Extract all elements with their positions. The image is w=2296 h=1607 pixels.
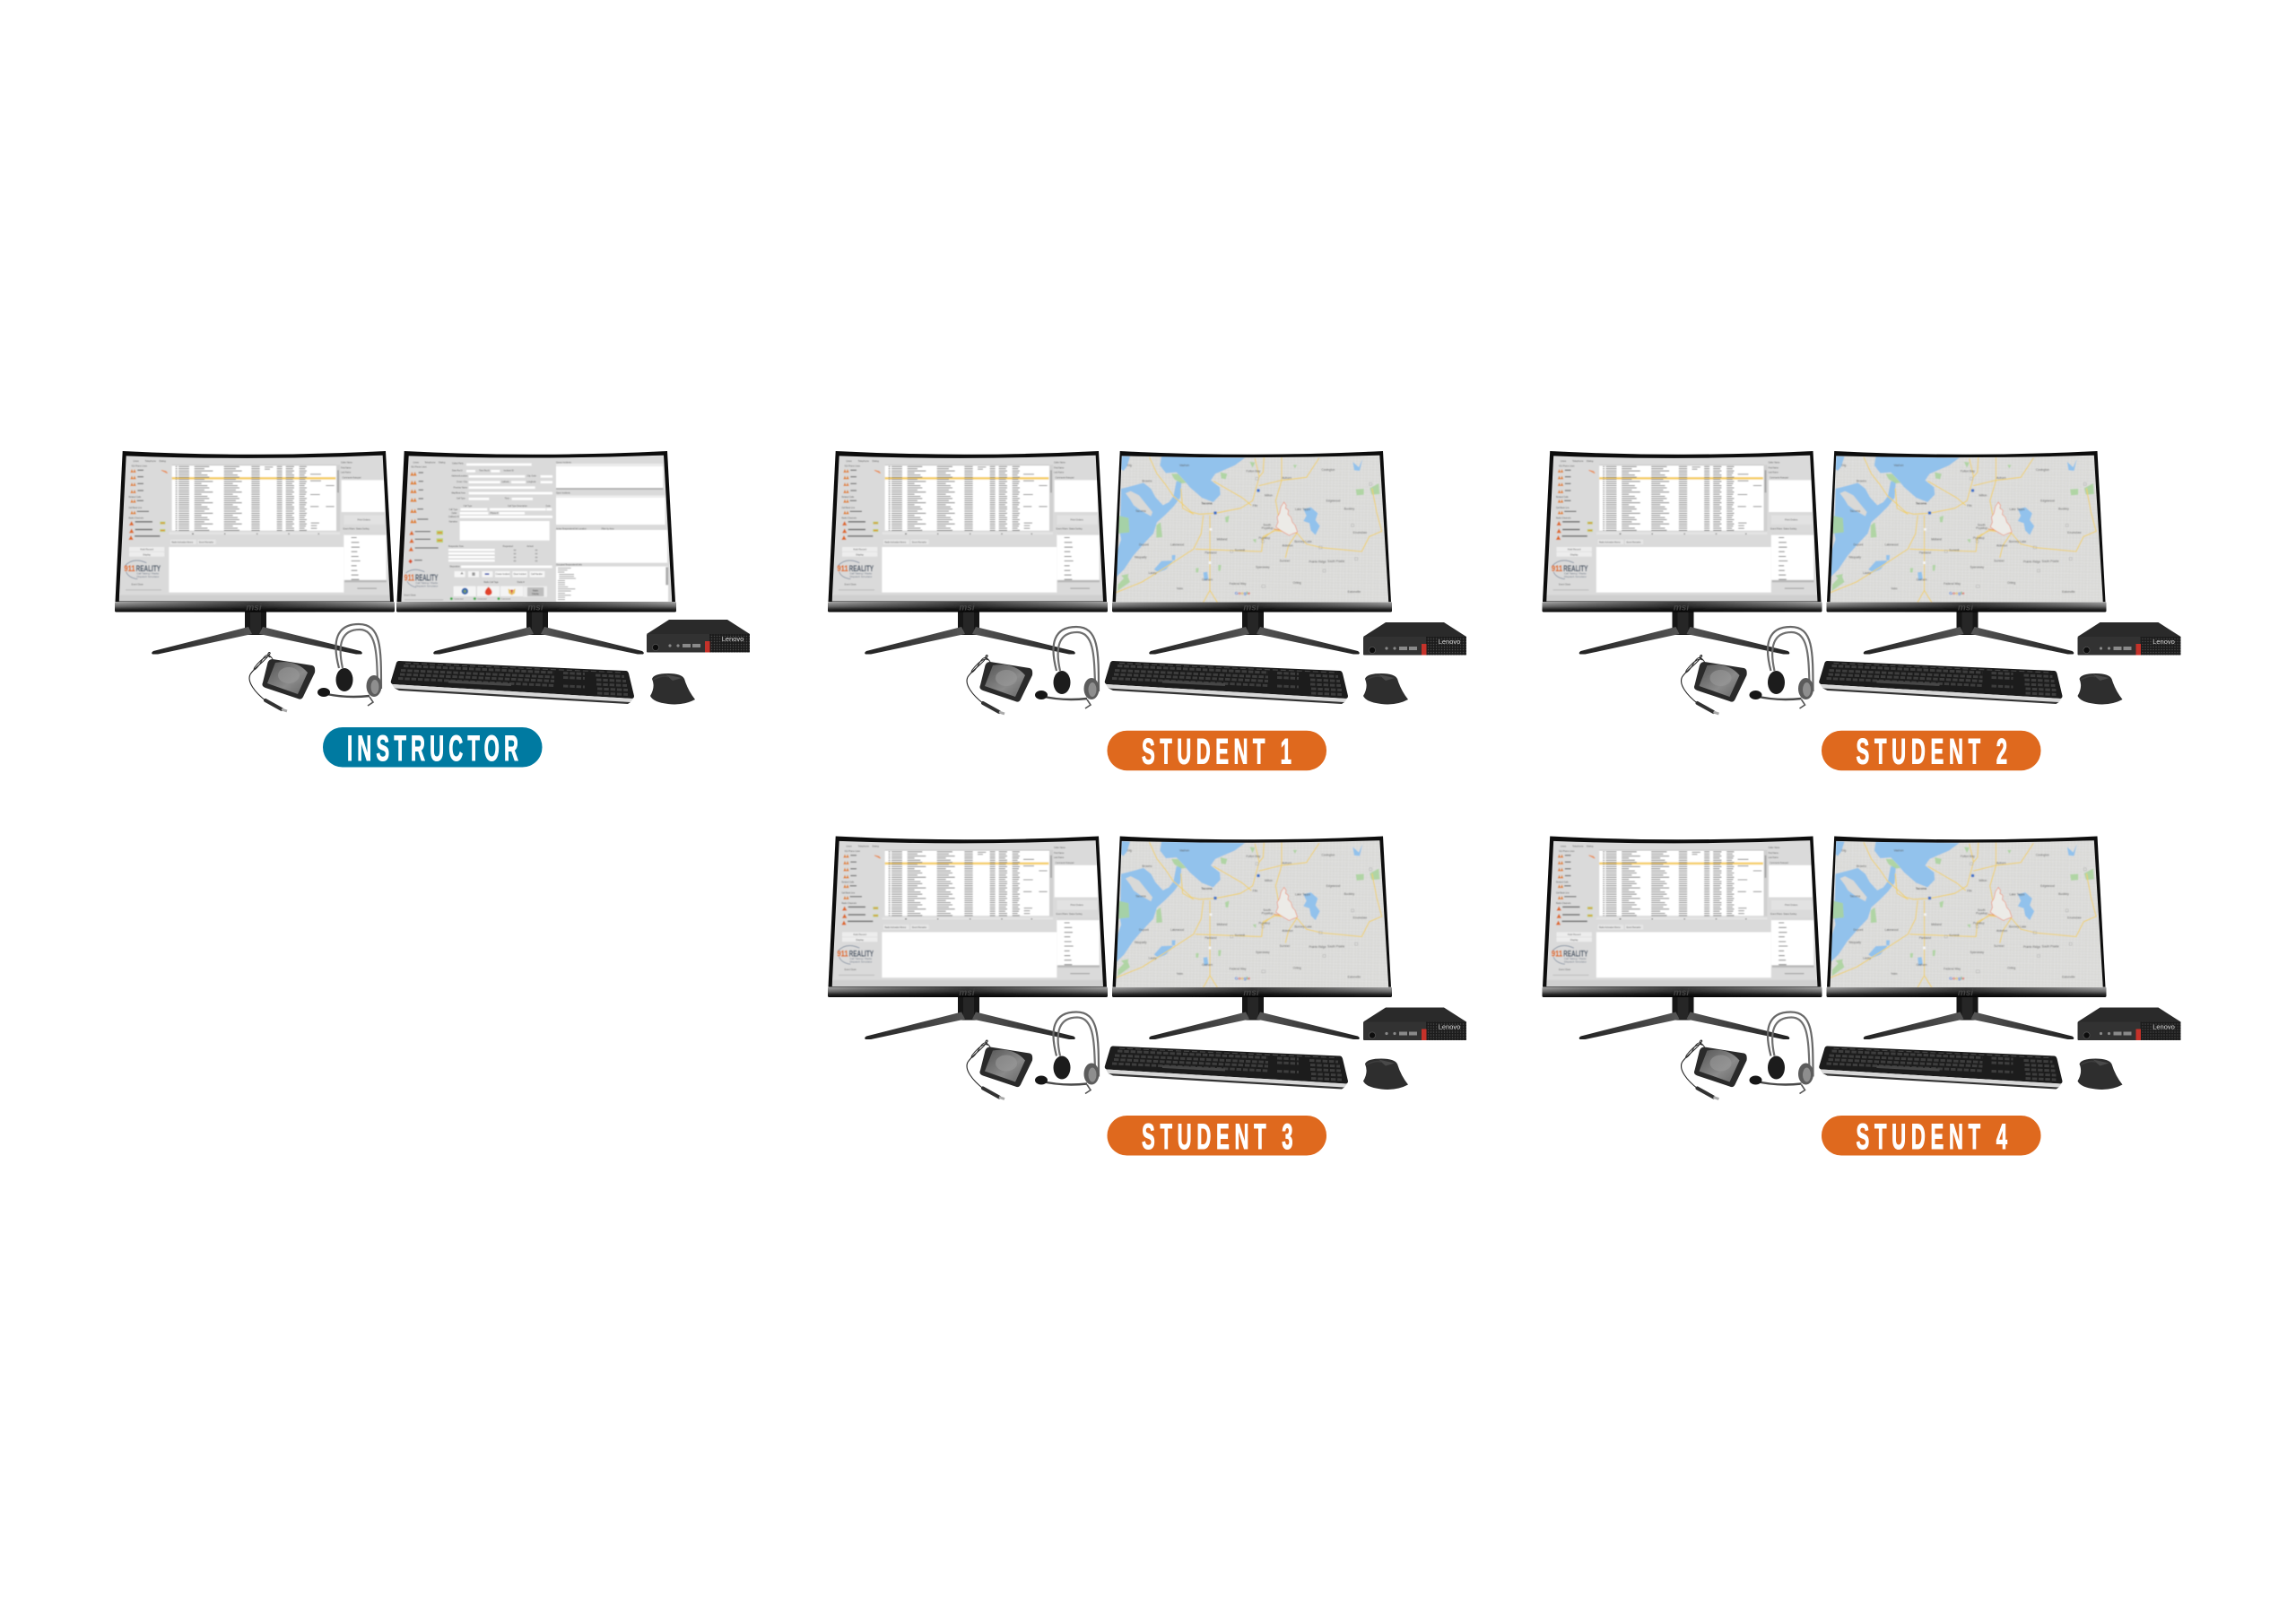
label: student 3: STUDENT 3 [1142, 1116, 1293, 1157]
icon: mini PC [647, 620, 750, 653]
panel: student 4 station [1543, 836, 2181, 1157]
icon: keyboard [1819, 661, 2063, 704]
icon: foot pedal [967, 656, 1032, 714]
icon: mouse [650, 673, 695, 704]
icon: foot pedal [249, 653, 315, 711]
icon: keyboard [1105, 661, 1348, 704]
icon: headset [1749, 627, 1813, 708]
label: student 4 [1822, 1116, 2041, 1157]
right monitor with call entry form [396, 451, 676, 655]
left monitor with dispatch table [1543, 451, 1822, 655]
icon: keyboard [1105, 1046, 1348, 1089]
label: student 2 [1822, 731, 2041, 771]
icon: mini PC [2077, 622, 2181, 655]
icon: mouse [2077, 673, 2122, 704]
left monitor with dispatch table [828, 836, 1108, 1039]
icon: foot pedal [1682, 1040, 1747, 1099]
icon: foot pedal [967, 1040, 1032, 1099]
panel: student 1 station [828, 451, 1466, 771]
right monitor with map [1112, 451, 1393, 655]
left monitor with dispatch table [1543, 836, 1822, 1039]
label: student 1: STUDENT 1 [1142, 732, 1292, 771]
icon: mini PC [1363, 622, 1466, 655]
label: student 2: STUDENT 2 [1857, 732, 2007, 771]
panel: student 2 station [1543, 451, 2181, 771]
label: instructor: INSTRUCTOR [347, 728, 518, 768]
right monitor with map [1826, 836, 2108, 1039]
icon: headset [1035, 1012, 1100, 1094]
icon: keyboard [391, 661, 634, 704]
icon: mouse [2077, 1058, 2122, 1090]
label: student 1 [1107, 731, 1326, 771]
label: student 4: STUDENT 4 [1857, 1116, 2007, 1157]
right monitor with map [1826, 451, 2108, 655]
icon: mouse [1363, 673, 1408, 704]
icon: headset [317, 624, 382, 706]
icon: headset [1749, 1012, 1813, 1094]
icon: mouse [1363, 1058, 1408, 1090]
panel: instructor station [115, 451, 750, 768]
panel: student 3 station [828, 836, 1466, 1157]
icon: mini PC [1363, 1008, 1466, 1040]
icon: keyboard [1819, 1046, 2063, 1089]
left monitor with dispatch table [115, 451, 395, 655]
left monitor with dispatch table [828, 451, 1108, 655]
label: student 3 [1107, 1116, 1326, 1157]
right monitor with map [1112, 836, 1393, 1039]
icon: mini PC [2077, 1008, 2181, 1040]
icon: foot pedal [1682, 656, 1747, 714]
icon: headset [1035, 627, 1100, 708]
